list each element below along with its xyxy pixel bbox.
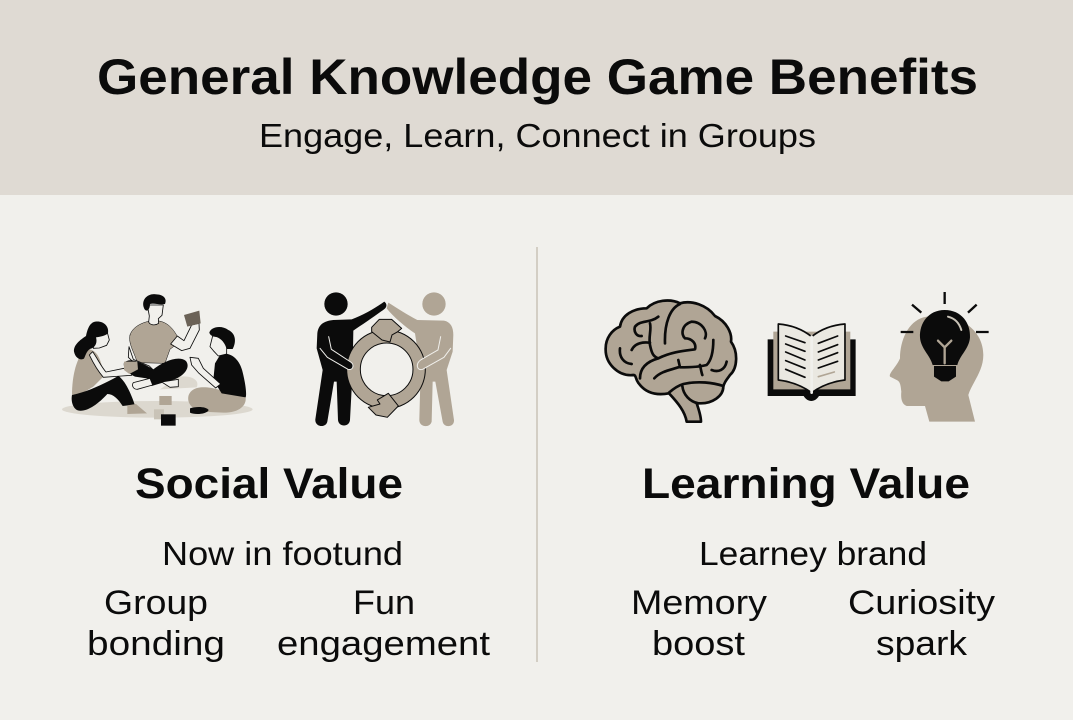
item: group bonding: bonding <box>87 625 225 663</box>
item: curiosity spark <box>848 584 995 663</box>
top handshake <box>372 319 402 342</box>
icon: two people joining hands around a ring <box>315 292 454 426</box>
ring <box>347 330 425 409</box>
text: learney brand: Learney brand <box>699 535 927 572</box>
woman <box>72 349 105 395</box>
item: curiosity spark: Curiosity <box>848 584 995 622</box>
taupe person <box>422 292 446 316</box>
item: group bonding: Group <box>104 584 208 622</box>
item: fun engagement: Fun <box>353 584 415 622</box>
icon: friends playing a card game <box>62 294 253 426</box>
rays <box>901 292 989 332</box>
right boy <box>188 387 246 413</box>
black person <box>324 292 348 316</box>
icon: open book <box>768 324 856 401</box>
cards <box>159 396 172 405</box>
bulb <box>920 310 970 365</box>
subtitle: Engage, Learn, Connect in Groups <box>259 117 816 154</box>
item: group bonding <box>87 584 225 663</box>
panel: social value <box>62 292 491 663</box>
icon: head with light bulb <box>890 292 989 422</box>
header band <box>0 0 1073 195</box>
item: curiosity spark: spark <box>876 625 968 663</box>
item: memory boost <box>631 584 767 663</box>
forearms <box>320 337 353 370</box>
bottom handshake <box>368 393 398 417</box>
heading: social value: Social Value <box>135 460 403 508</box>
icon: brain <box>606 301 736 422</box>
text: now in footund: Now in footund <box>162 535 403 572</box>
title: General Knowledge Game Benefits <box>97 49 978 105</box>
item: memory boost: Memory <box>631 584 767 622</box>
item: memory boost: boost <box>652 625 746 663</box>
panel: learning value <box>606 292 995 663</box>
heading: learning value: Learning Value <box>642 460 970 508</box>
item: fun engagement <box>277 584 491 663</box>
item: fun engagement: engagement <box>277 625 491 663</box>
center man <box>130 321 180 363</box>
